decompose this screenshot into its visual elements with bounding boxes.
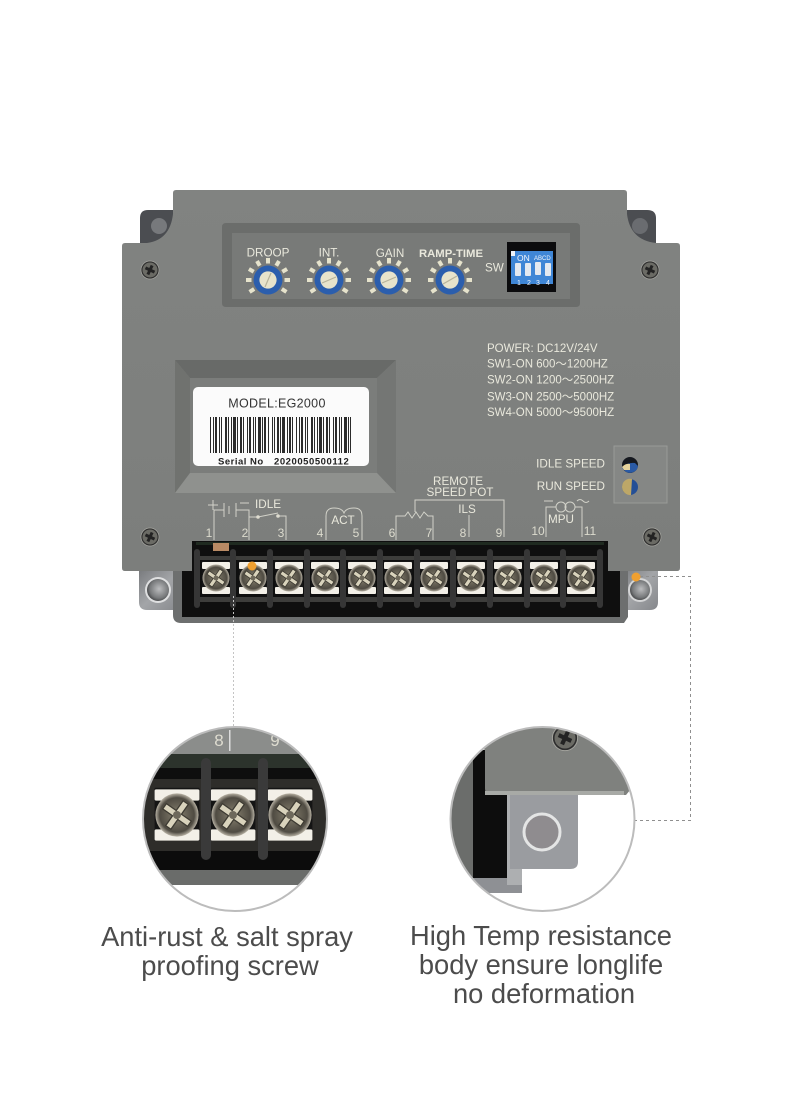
caption: body (410, 920, 672, 1009)
terminal dividers (194, 549, 603, 608)
schematic label: MPU: MPU (548, 513, 574, 526)
terminal screws (202, 561, 595, 594)
DIP switch: ON (517, 253, 530, 263)
mounting bracket: top right (624, 210, 656, 245)
knob label: INT.: INT. (319, 246, 339, 260)
panel screw: top right (641, 261, 659, 279)
schematic label: REMOTE SPEED POT: SPEED POT (427, 486, 493, 499)
zoomed screws (155, 788, 312, 841)
schematic label: REMOTE SPEED POT (427, 475, 493, 499)
label: RUN SPEED: RUN SPEED (537, 480, 605, 493)
terminal numbers: 8 (460, 526, 467, 540)
caption: body: no deformation (453, 978, 635, 1009)
marker: body (632, 572, 640, 582)
callout line: screw (232, 596, 234, 727)
terminal numbers: 5 (353, 526, 360, 540)
terminal numbers: 2 (242, 526, 249, 540)
specification text: SW4-ON 5000～9500HZ (487, 407, 614, 419)
panel screw: bottom left (141, 528, 159, 546)
knob label: RAMP-TIME: RAMP-TIME (419, 248, 483, 260)
terminal numbers: 3 (278, 526, 285, 540)
mounting bracket: bottom left (139, 568, 182, 610)
zoomed panel screw (552, 725, 578, 751)
knob: GAIN (367, 258, 411, 294)
knob label: DROOP: DROOP (247, 246, 290, 260)
barcode (210, 417, 351, 453)
product infographic (101, 190, 691, 1004)
specification text: SW3-ON 2500～5000HZ (487, 392, 614, 404)
terminal numbers (206, 524, 597, 540)
specification text: POWER: DC12V/24V (487, 343, 598, 355)
speed trim box (614, 446, 667, 503)
terminal numbers: 10 (531, 524, 545, 538)
knob: DROOP (246, 258, 290, 294)
knob: RAMP-TIME (428, 258, 472, 294)
DIP switch: 3 (536, 280, 540, 287)
zoomed number 9: 9 (270, 731, 280, 750)
schematic label: ILS: ILS (458, 503, 476, 516)
wiring schematic (206, 475, 597, 540)
terminal block (173, 541, 628, 623)
marker: screw (248, 562, 256, 570)
mounting bracket: bottom right (620, 568, 658, 610)
serial number: 2020050500112 (274, 456, 349, 468)
detail circle: screws (140, 725, 330, 915)
label: IDLE SPEED: IDLE SPEED (536, 458, 605, 470)
panel: adjustment recess (222, 223, 580, 307)
caption: screw: Anti-rust & salt spray (101, 921, 353, 952)
DIP switch: 2 (527, 280, 531, 287)
label: SW: SW (485, 262, 504, 274)
terminal numbers: 4 (317, 526, 324, 540)
panel screw: top left (141, 261, 159, 279)
terminal numbers: 9 (496, 526, 503, 540)
DIP switch (507, 242, 556, 292)
knob: INT (307, 258, 351, 294)
terminal numbers: 11 (584, 524, 597, 538)
caption: body: High Temp resistance (410, 920, 672, 951)
terminal numbers: 7 (426, 526, 433, 540)
panel: label recess (175, 360, 396, 493)
knob label: GAIN: GAIN (376, 247, 404, 260)
model sticker (193, 387, 369, 468)
DIP switch: 4 (546, 280, 550, 287)
specification text: SW1-ON 600～1200HZ (487, 358, 608, 370)
specification text (487, 343, 614, 419)
DIP switch: 1 (517, 280, 521, 287)
caption: screw (101, 921, 353, 981)
caption: body: body ensure longlife (419, 949, 663, 980)
detail circle: body edge (440, 725, 640, 915)
terminal numbers: 1 (206, 526, 213, 540)
model name: MODEL:EG2000 (228, 396, 326, 410)
caption: screw: proofing screw (141, 950, 319, 981)
zoomed number 8: 8 (214, 731, 224, 750)
schematic label: REMOTE SPEED POT: REMOTE (433, 475, 483, 488)
serial label: Serial No (218, 456, 264, 468)
callout line: body (634, 576, 690, 820)
schematic label: ACT: ACT (331, 514, 355, 527)
DIP switch: ABCD (534, 256, 551, 262)
panel screw: bottom right (643, 528, 661, 546)
schematic label: IDLE: IDLE (255, 498, 281, 511)
terminal numbers: 6 (389, 526, 396, 540)
controller body (122, 190, 680, 571)
mounting bracket: top left (140, 210, 176, 243)
specification text: SW2-ON 1200～2500HZ (487, 374, 614, 386)
